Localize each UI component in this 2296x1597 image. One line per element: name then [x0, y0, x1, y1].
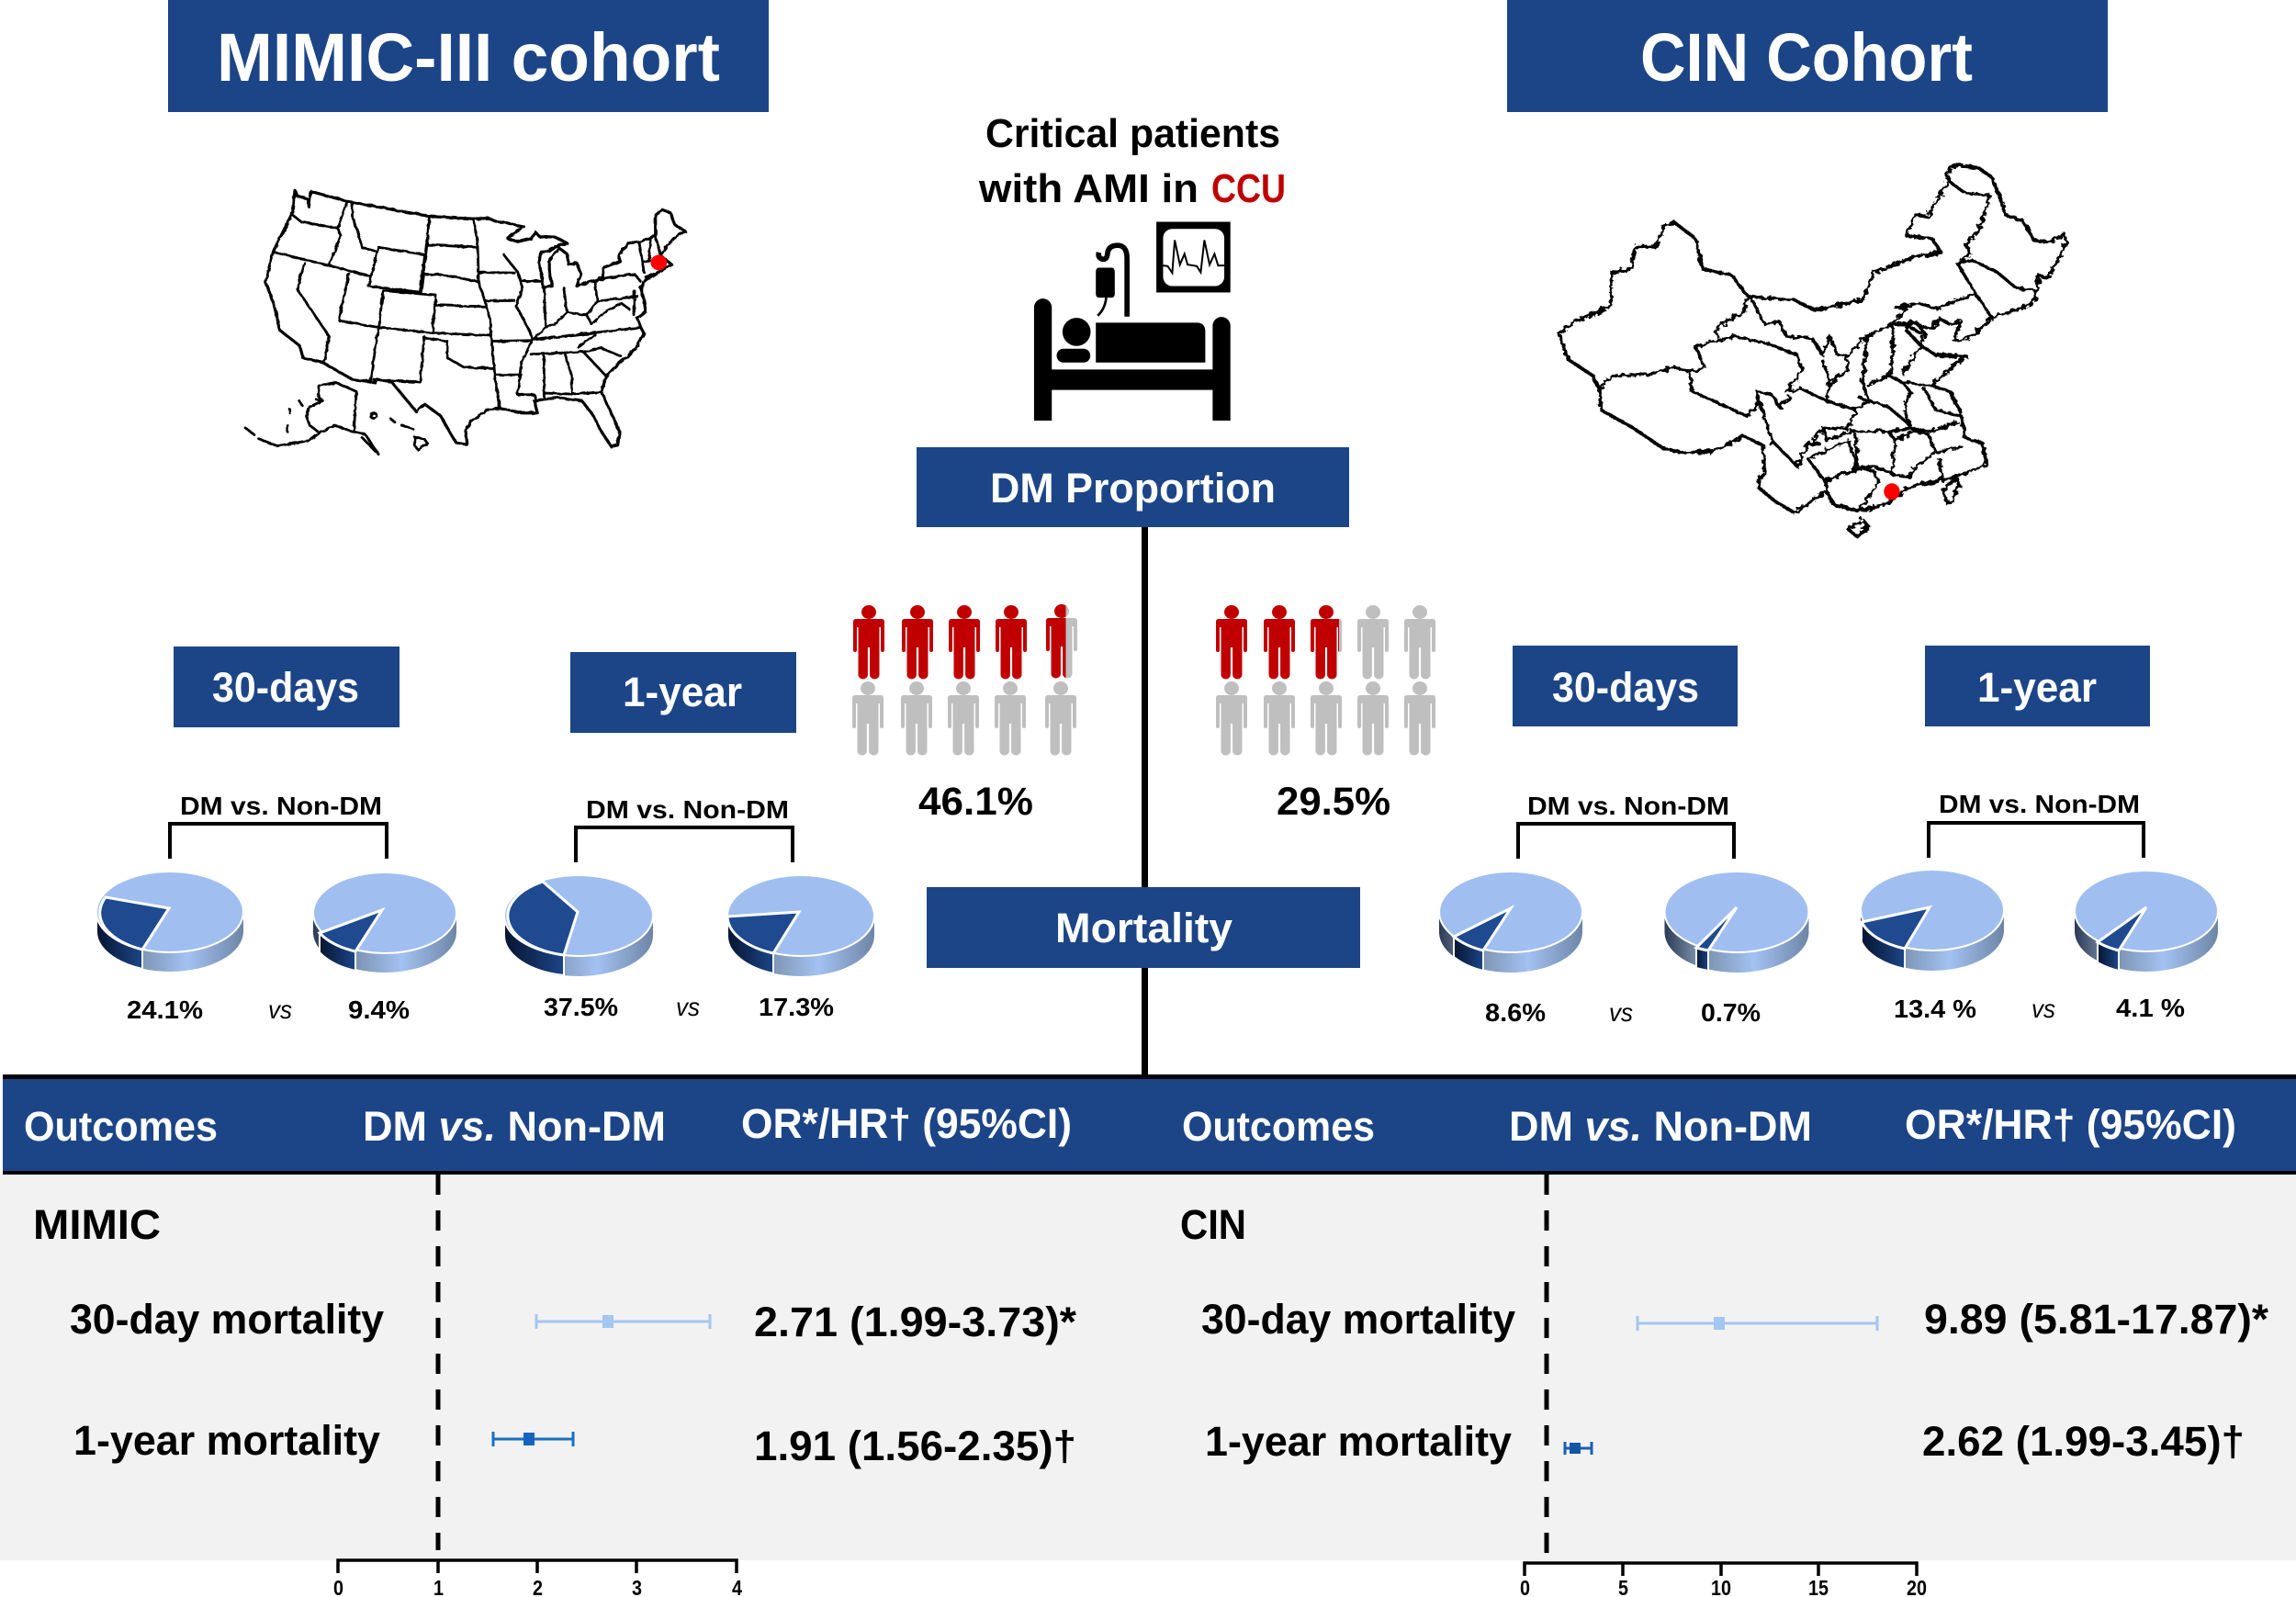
pictogram: 46.1% of patients with DM [852, 604, 1077, 824]
section label: Mortality: Mortality [1055, 905, 1232, 951]
label: CIN 30-days: 30-days [1552, 664, 1699, 711]
label: MIMIC 30-days: 30-days [212, 664, 359, 711]
section label: DM Proportion [917, 447, 1349, 527]
comparison: MIMIC 1-year pies 37.5% vs 17.3%: DM vs. Non-DM [586, 795, 789, 824]
axis: CIN odds/hazard ratio scale [1520, 1563, 1927, 1597]
forest plot: CIN: CIN [1180, 1201, 1246, 1248]
comparison: CIN 30-day pies 8.6% vs 0.7%: 0.7% [1701, 998, 1761, 1027]
forest plot: MIMIC: 1-year mortality [73, 1417, 380, 1464]
table header bar: OR*/HR† (95%CI) [741, 1100, 1072, 1147]
forest plot: CIN: 30-day mortality [1201, 1296, 1515, 1343]
forest plot: MIMIC [33, 1174, 1076, 1550]
comparison: CIN 1-year pies 13.4% vs 4.1% [1861, 790, 2218, 1023]
comparison: MIMIC 1-year pies 37.5% vs 17.3%: 17.3% [759, 993, 834, 1021]
comparison: MIMIC 1-year pies 37.5% vs 17.3%: vs [676, 993, 700, 1021]
table header bar [3, 1074, 2296, 1175]
icon: patient in hospital bed with monitor [1034, 222, 1231, 421]
comparison: MIMIC 30-day pies 24.1% vs 9.4% [96, 792, 456, 1024]
table header bar: OR*/HR† (95%CI) [1905, 1101, 2236, 1148]
axis: MIMIC odds/hazard ratio scale [333, 1560, 742, 1597]
results panel background [0, 1175, 2296, 1560]
forest plot: CIN [1180, 1174, 2269, 1555]
title: critical patients: CCU [1211, 166, 1286, 211]
pictogram: 29.5% of patients with DM: 29.5% [1277, 780, 1390, 824]
comparison: CIN 1-year pies 13.4% vs 4.1%: DM vs. Non-DM [1939, 790, 2140, 818]
comparison: CIN 30-day pies 8.6% vs 0.7% [1439, 792, 1809, 1027]
label: CIN 1-year [1925, 646, 2150, 726]
label: MIMIC 1-year: 1-year [623, 669, 742, 715]
title: critical patients: with AMI in [978, 166, 1199, 211]
table header bar: Outcomes [1182, 1103, 1375, 1150]
comparison: MIMIC 30-day pies 24.1% vs 9.4%: 9.4% [348, 995, 410, 1024]
comparison: MIMIC 30-day pies 24.1% vs 9.4%: vs [268, 995, 292, 1024]
forest plot: CIN: 2.62 (1.99-3.45)† [1922, 1418, 2245, 1465]
comparison: MIMIC 30-day pies 24.1% vs 9.4%: 24.1% [127, 995, 203, 1024]
cohort heading: MIMIC-III [168, 0, 769, 112]
section label: DM Proportion: DM Proportion [990, 465, 1276, 512]
pictogram: 29.5% of patients with DM [1216, 605, 1435, 824]
pictogram: 46.1% of patients with DM: 46.1% [918, 780, 1033, 824]
forest plot: MIMIC: 2.71 (1.99-3.73)* [754, 1299, 1076, 1345]
comparison: MIMIC 30-day pies 24.1% vs 9.4%: DM vs. Non-DM [180, 792, 382, 820]
cohort heading: CIN [1507, 0, 2108, 112]
title: critical patients: Critical patients [985, 111, 1280, 156]
comparison: CIN 30-day pies 8.6% vs 0.7%: 8.6% [1485, 998, 1546, 1027]
forest plot: MIMIC: 1.91 (1.56-2.35)† [754, 1423, 1076, 1469]
forest plot: CIN: 1-year mortality [1205, 1418, 1512, 1465]
map: United States with red location marker [245, 190, 685, 455]
comparison: CIN 1-year pies 13.4% vs 4.1%: 13.4 % [1894, 995, 1976, 1023]
table header bar: Outcomes [24, 1103, 218, 1150]
map: China with red location marker [1559, 165, 2066, 537]
title: critical patients [978, 111, 1286, 211]
label: MIMIC 1-year [570, 652, 796, 733]
forest plot: MIMIC: MIMIC [33, 1201, 161, 1248]
cohort heading: CIN: CIN Cohort [1640, 19, 1973, 96]
comparison: MIMIC 1-year pies 37.5% vs 17.3%: 37.5% [544, 993, 618, 1021]
label: CIN 1-year: 1-year [1977, 664, 2097, 711]
cohort heading: MIMIC-III: MIMIC-III cohort [217, 19, 720, 96]
table header bar: DM vs. Non-DM [1509, 1103, 1812, 1150]
comparison: CIN 30-day pies 8.6% vs 0.7%: DM vs. Non-DM [1527, 792, 1729, 820]
forest plot: MIMIC: 30-day mortality [70, 1296, 384, 1343]
comparison: CIN 1-year pies 13.4% vs 4.1%: vs [2032, 995, 2055, 1023]
table header bar: DM vs. Non-DM [363, 1103, 666, 1150]
label: CIN 30-days [1513, 646, 1738, 726]
comparison: MIMIC 1-year pies 37.5% vs 17.3% [504, 795, 874, 1021]
comparison: CIN 1-year pies 13.4% vs 4.1%: 4.1 % [2116, 994, 2185, 1022]
label: MIMIC 30-days [174, 647, 400, 727]
section label: Mortality [927, 887, 1360, 968]
comparison: CIN 30-day pies 8.6% vs 0.7%: vs [1609, 998, 1633, 1027]
central vertical divider [1142, 527, 1148, 1076]
forest plot: CIN: 9.89 (5.81-17.87)* [1924, 1296, 2269, 1343]
